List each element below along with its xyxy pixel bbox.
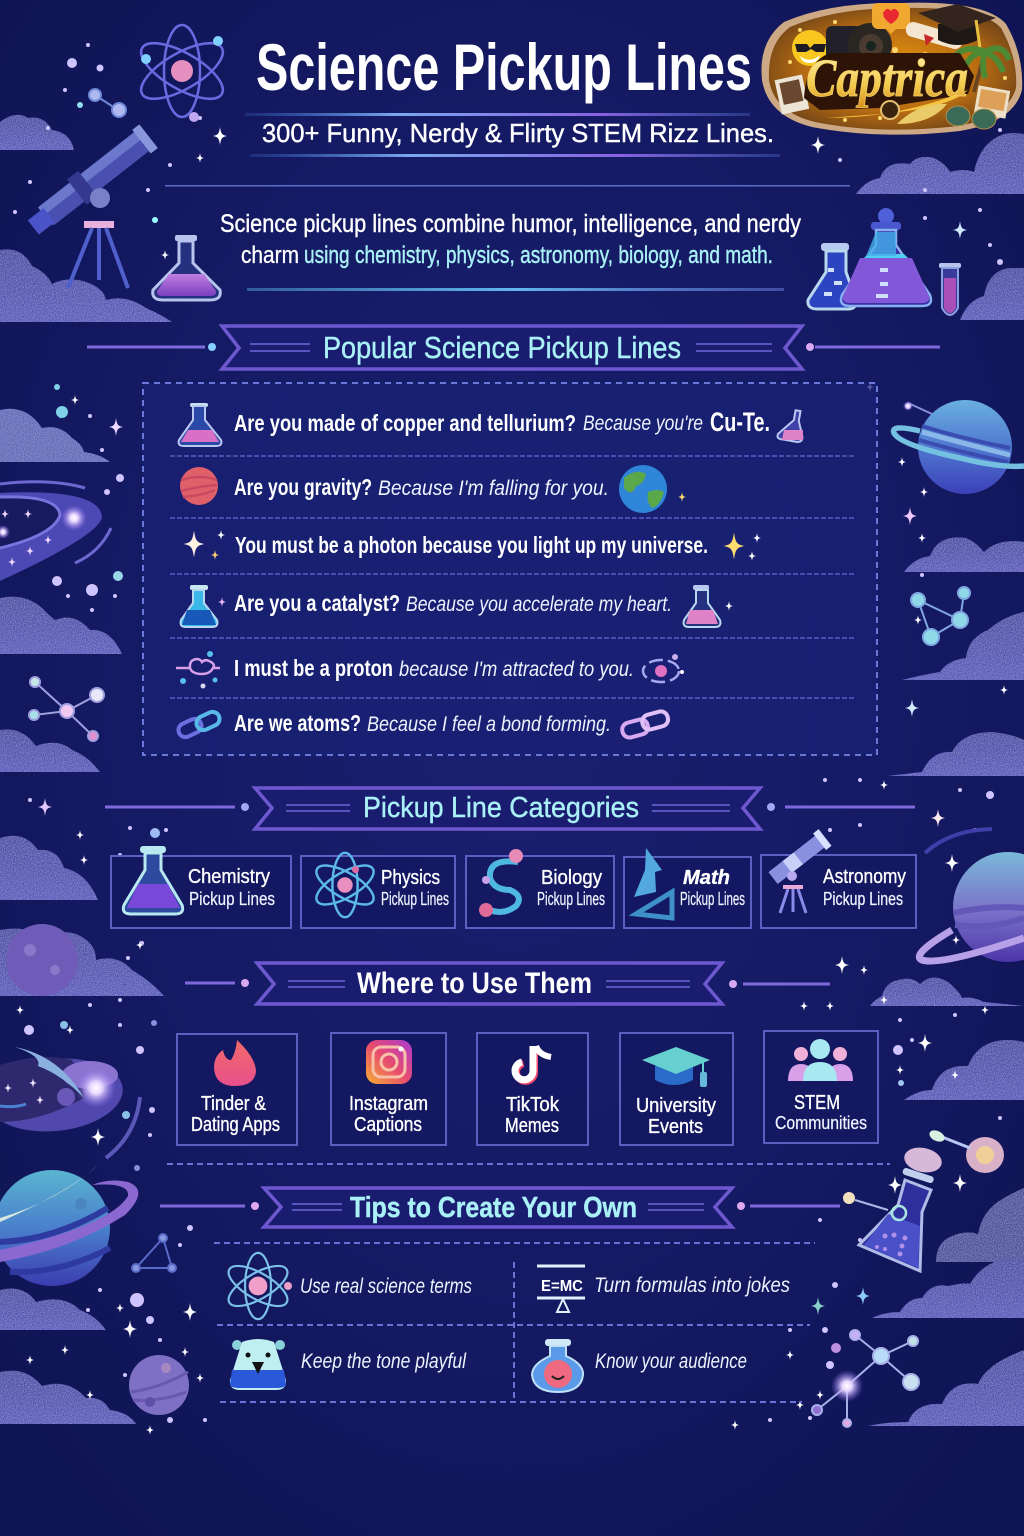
card: Math xyxy=(624,848,751,928)
tip: formulas: E=MC xyxy=(541,1278,583,1295)
card: Biology: Pickup Lines xyxy=(537,889,605,909)
tip: playful: Keep the tone playful xyxy=(301,1350,467,1373)
intro text: charm xyxy=(241,242,299,269)
line 1 xyxy=(179,403,807,446)
tip: audience xyxy=(532,1339,747,1392)
tip: formulas xyxy=(537,1266,790,1312)
line 5: I must be a proton xyxy=(234,655,393,681)
card: Astronomy xyxy=(761,829,916,928)
card: Tinder xyxy=(177,1034,297,1145)
planet: lower left xyxy=(0,1165,138,1286)
card: Tinder: Dating Apps xyxy=(191,1114,280,1136)
card: Astronomy: Pickup Lines xyxy=(823,889,903,909)
line 1: Cu-Te. xyxy=(710,407,770,437)
banner: Pickup Line Categories xyxy=(105,788,915,829)
card: Chemistry: Chemistry xyxy=(188,866,270,888)
line 2: Are you gravity? xyxy=(234,474,372,500)
card: University: University xyxy=(636,1095,716,1117)
line 4: Are you a catalyst? xyxy=(234,590,400,616)
line 4: Because you accelerate my heart. xyxy=(406,593,672,616)
tip: formulas: Turn formulas into jokes xyxy=(594,1274,790,1297)
card: University: Events xyxy=(648,1116,703,1138)
banner: Pickup Line Categories: Pickup Line Categories xyxy=(363,792,639,824)
panel: tips xyxy=(214,1243,815,1402)
icon: left flask xyxy=(153,235,220,300)
tip: playful xyxy=(230,1339,467,1390)
line 5: because I'm attracted to you. xyxy=(399,658,634,681)
card: STEM: Communities xyxy=(775,1113,867,1133)
flask: lower right with smoke xyxy=(843,1128,1004,1271)
card: Math: Pickup Lines xyxy=(680,889,745,909)
divider: dashed above tips xyxy=(167,1163,890,1165)
constellation: triangle left xyxy=(132,1234,176,1272)
logo: Captrica xyxy=(806,48,968,108)
tip: real terms: Use real science terms xyxy=(300,1275,472,1298)
line 3: You must be a photon because you light up my universe. xyxy=(235,532,708,558)
card: University xyxy=(620,1033,733,1145)
card: Math: Math xyxy=(683,867,730,889)
card: TikTok xyxy=(477,1033,588,1145)
card: Instagram: Instagram xyxy=(349,1093,428,1115)
constellation: right xyxy=(911,587,970,645)
intro text xyxy=(220,210,801,269)
banner: Tips to Create Your Own xyxy=(160,1188,840,1227)
card: STEM: STEM xyxy=(794,1092,840,1114)
galaxy left xyxy=(0,482,111,581)
icon: right flasks xyxy=(808,208,961,315)
line 2: Because I'm falling for you. xyxy=(378,477,609,500)
line 5 xyxy=(176,651,684,688)
card: Astronomy: Astronomy xyxy=(823,866,906,888)
card: Physics xyxy=(301,853,455,928)
card: Physics: Physics xyxy=(381,867,440,889)
line 3 xyxy=(184,530,761,561)
icon: header atom xyxy=(133,25,231,122)
line 6: Because I feel a bond forming. xyxy=(367,713,611,736)
card: Chemistry: Pickup Lines xyxy=(189,889,275,909)
line 1: Are you made of copper and tellurium? xyxy=(234,410,576,436)
tip: audience: Know your audience xyxy=(595,1350,747,1373)
galaxy: left xyxy=(0,1047,140,1158)
card: Tinder: Tinder & xyxy=(201,1093,267,1115)
planet: small bottom left xyxy=(129,1355,189,1415)
banner: Tips to Create Your Own: Tips to Create Your Own xyxy=(350,1192,637,1224)
card: TikTok: Memes xyxy=(505,1115,559,1137)
banner: Popular Science Pickup Lines: Popular Science Pickup Lines xyxy=(323,330,681,365)
tip: real terms xyxy=(223,1253,472,1319)
line 6 xyxy=(176,710,670,739)
planet: top right ringed xyxy=(894,400,1024,494)
card: TikTok: TikTok xyxy=(506,1094,560,1116)
card: STEM xyxy=(764,1031,878,1143)
line 6: Are we atoms? xyxy=(234,710,361,736)
intro text: using chemistry, physics, astronomy, biology, and math. xyxy=(304,242,773,269)
subtitle: 300+ Funny, Nerdy & Flirty STEM Rizz Lines. xyxy=(262,118,774,148)
card: Instagram: Captions xyxy=(354,1114,422,1136)
line 2 xyxy=(180,465,686,513)
card: Chemistry xyxy=(111,846,291,928)
banner: Where to Use Them: Where to Use Them xyxy=(357,967,592,1000)
banner: Where to Use Them xyxy=(185,963,830,1004)
card: Instagram xyxy=(331,1033,446,1145)
icon: telescope xyxy=(23,124,158,288)
planet: right lower xyxy=(919,829,1024,962)
card: Biology: Biology xyxy=(541,867,602,889)
card: Physics: Pickup Lines xyxy=(381,889,449,909)
title: Science Pickup Lines xyxy=(256,30,752,104)
banner: Popular Science Pickup Lines xyxy=(87,326,940,369)
line 1: Because you're xyxy=(583,412,703,435)
icon: constellation top left xyxy=(77,89,126,117)
logo xyxy=(761,3,1022,135)
constellation: left xyxy=(29,677,104,741)
panel: popular lines xyxy=(143,383,877,755)
title divider xyxy=(245,113,750,116)
moon left xyxy=(6,924,78,996)
constellation: bottom right xyxy=(812,1330,919,1427)
line 4 xyxy=(181,585,733,627)
card: Biology xyxy=(466,849,614,928)
intro text: Science pickup lines combine humor, intelligence, and nerdy xyxy=(220,210,801,238)
